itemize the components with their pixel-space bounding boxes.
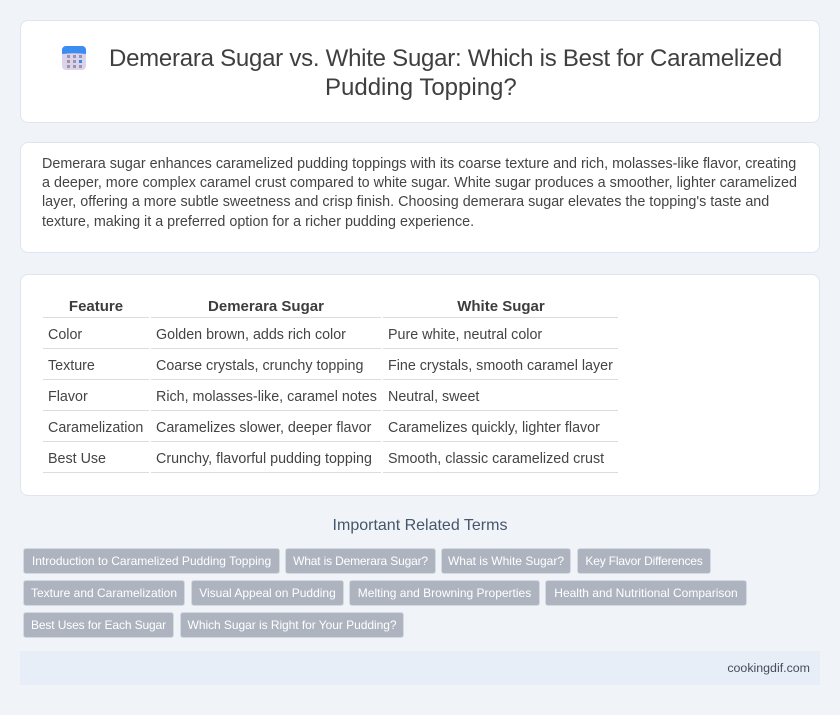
row: color: Color — [48, 327, 82, 343]
caramelization: white: Caramelizes quickly, lighter flavor — [388, 420, 600, 436]
color: white: Pure white, neutral color — [388, 327, 542, 343]
tag — [545, 580, 747, 606]
related terms tags — [23, 548, 747, 638]
tag — [23, 612, 174, 638]
table header: demerara sugar: Demerara Sugar — [208, 298, 324, 315]
comparison table panel — [20, 274, 820, 496]
related terms heading: Important Related Terms — [333, 517, 507, 534]
intro paragraph: Demerara sugar enhances caramelized pudding toppings with its coarse texture and rich, molasses-like flavor, creating — [42, 156, 796, 172]
tag: What is Demerara Sugar? — [293, 554, 428, 568]
color: demerara: Golden brown, adds rich color — [156, 327, 346, 343]
tag: Texture and Caramelization — [31, 586, 177, 600]
intro paragraph: a deeper, more complex caramel crust compared to white sugar. White sugar produces a smoother, lighter caramelized — [42, 175, 797, 191]
title: Pudding Topping? — [325, 74, 517, 101]
row: caramelization: Caramelization — [48, 420, 143, 436]
tag: What is White Sugar? — [448, 554, 564, 568]
header panel — [20, 20, 820, 123]
flavor: demerara: Rich, molasses-like, caramel notes — [156, 389, 377, 405]
intro text panel — [20, 142, 820, 253]
title — [109, 45, 782, 101]
tag: Health and Nutritional Comparison — [554, 586, 738, 600]
tag — [285, 548, 436, 574]
tag: Visual Appeal on Pudding — [199, 586, 336, 600]
tag — [577, 548, 711, 574]
caramelization: demerara: Caramelizes slower, deeper flavor — [156, 420, 371, 436]
texture: white: Fine crystals, smooth caramel layer — [388, 358, 613, 374]
tag — [441, 548, 571, 574]
tag: Introduction to Caramelized Pudding Topping — [32, 554, 271, 568]
texture: demerara: Coarse crystals, crunchy topping — [156, 358, 363, 374]
icon: calendar — [62, 46, 86, 70]
row: best use: Best Use — [48, 451, 106, 467]
title: Demerara Sugar vs. White Sugar: Which is Best for Caramelized — [109, 45, 782, 72]
tag: Best Uses for Each Sugar — [31, 618, 166, 632]
best use: demerara: Crunchy, flavorful pudding topping — [156, 451, 372, 467]
tag — [349, 580, 540, 606]
best use: white: Smooth, classic caramelized crust — [388, 451, 604, 467]
row: flavor: Flavor — [48, 389, 88, 405]
row: texture: Texture — [48, 358, 95, 374]
tag — [23, 548, 280, 574]
footer source text: cookingdif.com — [727, 661, 810, 675]
intro paragraph: texture, making it a preferred option for a richer pudding experience. — [42, 214, 474, 230]
tag — [23, 580, 185, 606]
tag: Melting and Browning Properties — [358, 586, 531, 600]
table header: white sugar: White Sugar — [457, 298, 545, 315]
table header: feature: Feature — [69, 298, 123, 315]
footer bar — [20, 651, 820, 685]
tag: Which Sugar is Right for Your Pudding? — [188, 618, 396, 632]
intro paragraph — [42, 156, 797, 230]
tag — [180, 612, 404, 638]
flavor: white: Neutral, sweet — [388, 389, 479, 405]
tag: Key Flavor Differences — [585, 554, 703, 568]
intro paragraph: layer, offering a more subtle sweetness and crisp finish. Choosing demerara sugar elevates the topping's taste and — [42, 194, 769, 210]
tag — [191, 580, 344, 606]
